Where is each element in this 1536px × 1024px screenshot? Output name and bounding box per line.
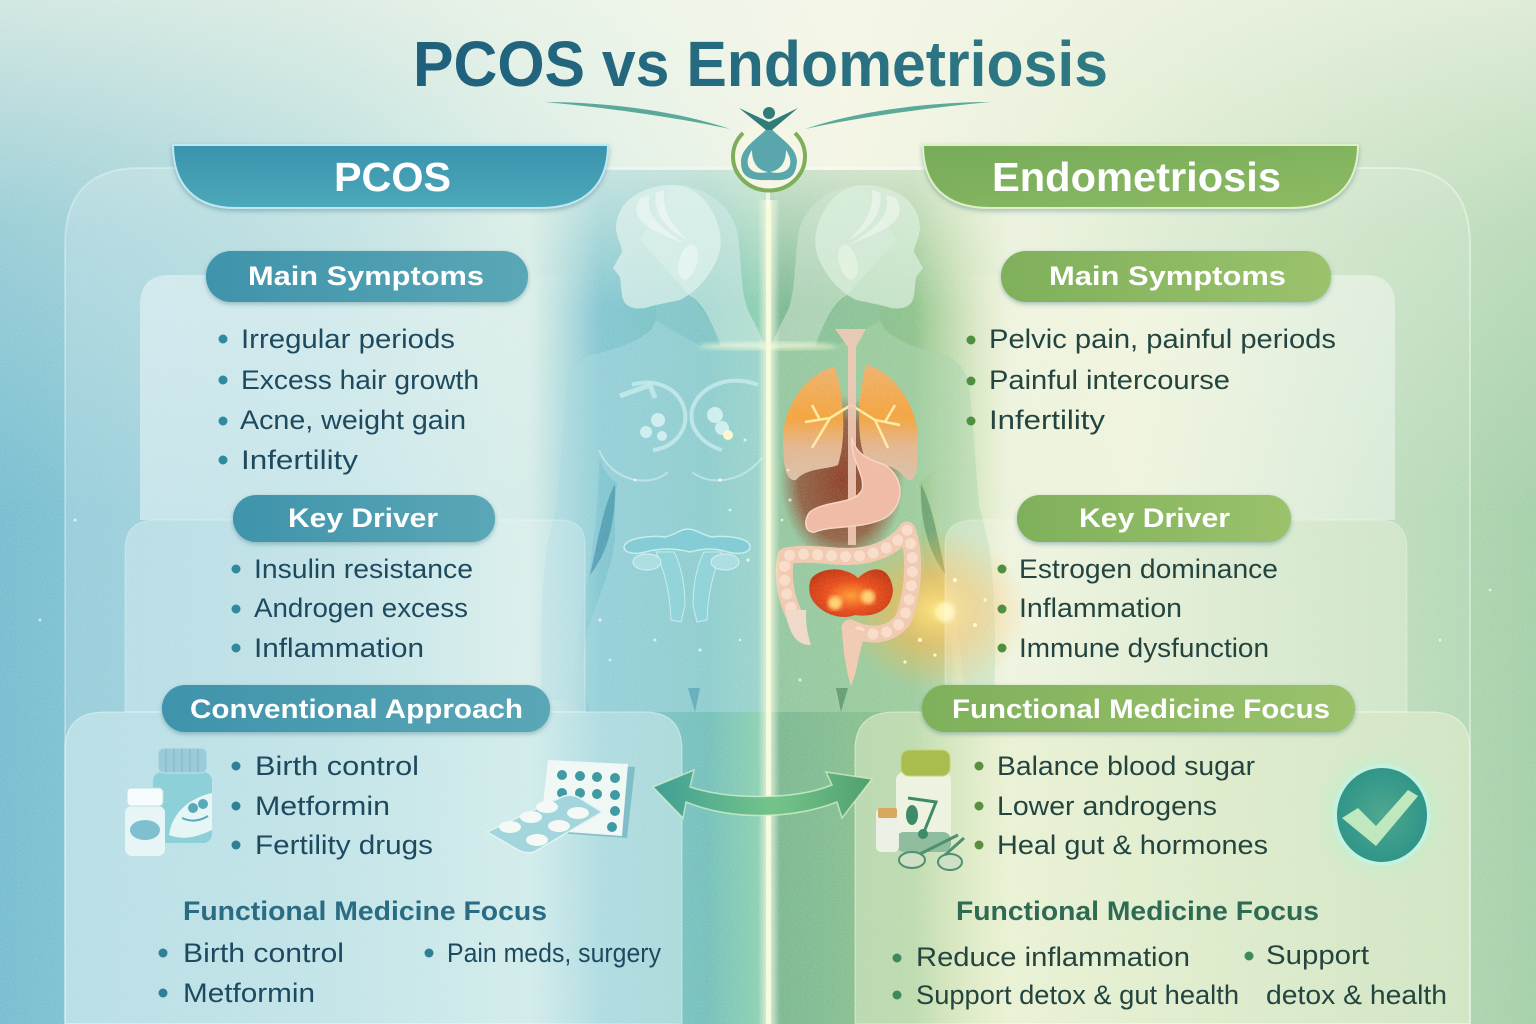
list: endometriosis symptoms: [966, 324, 1336, 435]
panel: endometriosis key driver: [945, 520, 1407, 712]
arm gap shadow: [590, 484, 615, 575]
list: endometriosis key drivers: Estrogen dominance: [1019, 554, 1278, 584]
list: PCOS symptoms: Excess hair growth: [241, 365, 479, 395]
list: PCOS symptoms: Infertility: [241, 445, 359, 475]
heading: PCOS functional medicine focus: Functional Medicine Focus: [183, 896, 547, 926]
inflamed intestine: [809, 569, 893, 617]
dark abdominal cavity: [780, 395, 904, 565]
list: endometriosis functional medicine: detox & health: [1266, 980, 1447, 1010]
banner: Endometriosis: [923, 145, 1358, 208]
face: [613, 185, 721, 308]
pill: functional medicine focus: Functional Medicine Focus: [952, 694, 1330, 724]
list: PCOS key drivers: Insulin resistance: [254, 554, 473, 584]
list: functional medicine focus: Balance blood sugar: [997, 751, 1255, 781]
list: PCOS symptoms: Irregular periods: [241, 324, 455, 354]
hair strands: [636, 190, 688, 243]
panel: PCOS main symptoms: [140, 275, 590, 520]
right hair strands: [848, 190, 900, 243]
pill: PCOS key driver: [233, 495, 495, 542]
icon: supplement bottle and spoons: [876, 750, 964, 870]
pill: PCOS key driver: Key Driver: [288, 503, 439, 533]
torso and arm: [541, 320, 780, 712]
banner: Endometriosis: Endometriosis: [992, 154, 1281, 200]
list: PCOS functional medicine: Birth control: [183, 938, 344, 968]
pill: conventional approach: Conventional Approach: [190, 694, 523, 724]
icon: blister packs: [487, 760, 635, 853]
central teal and green field: [530, 170, 1010, 1024]
list: PCOS symptoms: Acne, weight gain: [240, 405, 466, 435]
list: functional medicine focus: [974, 751, 1268, 860]
pill: endometriosis main symptoms: Main Symptoms: [1049, 261, 1286, 291]
illustration: internal organs: [780, 329, 1030, 690]
heading: endometriosis functional medicine focus: Functional Medicine Focus: [956, 896, 1319, 926]
chest lines: [599, 450, 762, 481]
sparkle: [935, 602, 955, 622]
pill: endometriosis main symptoms: [1001, 251, 1331, 302]
icon: uterus: [624, 529, 750, 622]
title: PCOS vs Endometriosis: [413, 28, 1108, 100]
pill: functional medicine focus: [922, 685, 1355, 732]
list: conventional approach: Metformin: [255, 791, 390, 821]
list: endometriosis key drivers: Immune dysfunction: [1019, 633, 1269, 663]
panel: left outer card: [65, 168, 760, 1024]
neck shadow: [656, 296, 722, 346]
icon: check badge: [1326, 759, 1438, 871]
pill: conventional approach: [162, 685, 550, 732]
list: PCOS functional medicine: Pain meds, surgery: [447, 938, 661, 968]
panel: endometriosis main symptoms: [950, 275, 1395, 520]
arrow: curved double-headed: [653, 770, 872, 818]
list: functional medicine focus: Heal gut & hormones: [997, 830, 1268, 860]
icon: pill bottles: [125, 748, 212, 856]
list: endometriosis key drivers: [998, 554, 1278, 663]
list: PCOS functional medicine: [158, 938, 661, 1008]
list: conventional approach: [232, 751, 433, 860]
pill: PCOS main symptoms: [206, 251, 528, 302]
list: endometriosis functional medicine: Reduce inflammation: [916, 942, 1190, 972]
pill: endometriosis key driver: [1017, 495, 1291, 542]
right thigh gap: [836, 688, 848, 712]
trachea: [835, 329, 866, 545]
ear: [678, 244, 698, 280]
right torso and arm: [756, 320, 995, 712]
list: PCOS symptoms: [218, 324, 479, 475]
list: endometriosis symptoms: Pelvic pain, painful periods: [989, 324, 1336, 354]
back hair: [640, 185, 764, 348]
right back hair: [772, 188, 863, 348]
list: endometriosis functional medicine: [892, 940, 1447, 1010]
right face: [815, 185, 923, 308]
list: endometriosis key drivers: Inflammation: [1019, 593, 1182, 623]
list: PCOS key drivers: Androgen excess: [254, 593, 468, 623]
pill: endometriosis key driver: Key Driver: [1079, 503, 1231, 533]
list: endometriosis functional medicine: Support: [1266, 940, 1370, 970]
stomach: [806, 438, 900, 532]
list: conventional approach: Birth control: [255, 751, 419, 781]
lungs: [783, 367, 843, 480]
right arm gap shadow: [921, 484, 946, 575]
list: PCOS key drivers: [232, 554, 473, 663]
colon: [784, 530, 913, 634]
panel: right outer card: [776, 168, 1470, 1024]
list: endometriosis functional medicine: Support detox & gut health: [916, 980, 1239, 1010]
banner: PCOS: PCOS: [334, 154, 451, 200]
panel: PCOS key driver: [125, 520, 585, 712]
rectum: [842, 625, 866, 686]
pill: PCOS main symptoms: Main Symptoms: [248, 261, 484, 291]
panel: endometriosis functional medicine: [855, 712, 1470, 1024]
bronchi: [805, 405, 900, 448]
speckles: [39, 438, 1491, 682]
right neck shadow: [815, 332, 820, 345]
list: conventional approach: Fertility drugs: [255, 830, 433, 860]
silhouette: left woman: [541, 185, 780, 712]
right ear: [838, 244, 858, 280]
silhouette: right woman: [756, 185, 995, 712]
banner: PCOS: [173, 145, 608, 208]
orange glow: [840, 530, 1030, 690]
panel: PCOS conventional approach: [65, 712, 682, 1024]
list: functional medicine focus: Lower androgens: [997, 791, 1217, 821]
logo emblem: [545, 102, 990, 191]
list: PCOS key drivers: Inflammation: [254, 633, 424, 663]
sparks: [903, 578, 987, 664]
thigh gap: [688, 688, 700, 712]
list: endometriosis symptoms: Painful intercourse: [989, 365, 1230, 395]
icon: faint lungs in left torso: [620, 381, 758, 450]
cecum: [785, 610, 811, 645]
central light beam: [698, 200, 838, 1024]
list: PCOS functional medicine: Metformin: [183, 978, 315, 1008]
list: endometriosis symptoms: Infertility: [989, 405, 1106, 435]
